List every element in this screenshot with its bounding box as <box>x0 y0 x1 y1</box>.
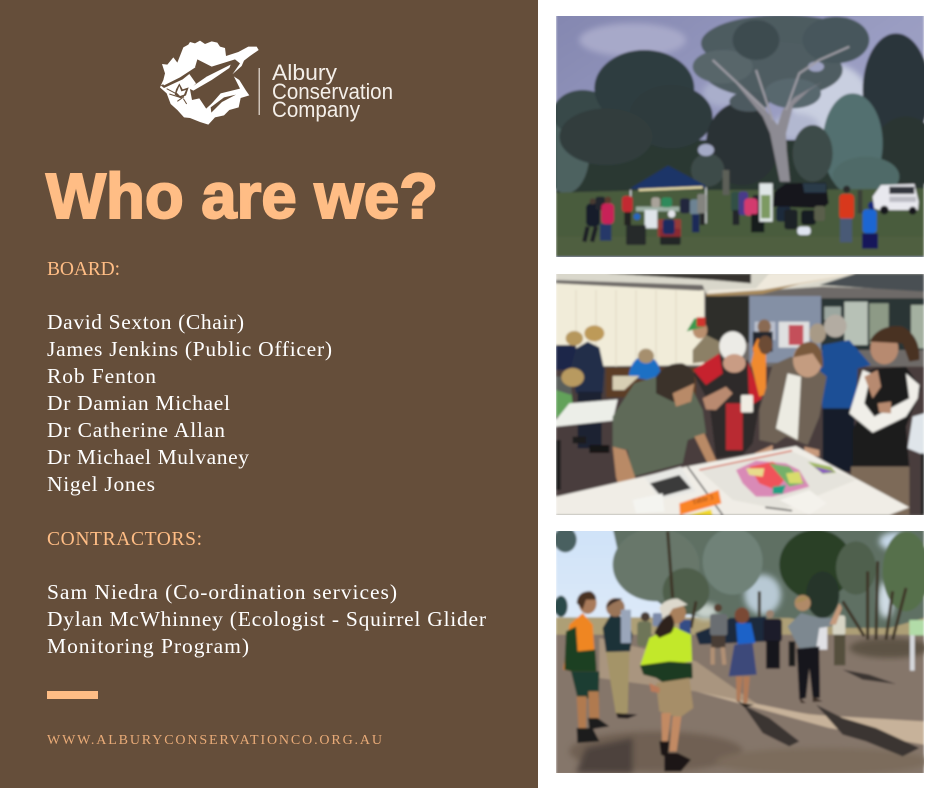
woman in hi-vis <box>640 626 692 666</box>
woman in red and black vest <box>693 353 761 458</box>
text: logo wordmark: Company <box>272 97 360 122</box>
text block: board members: Dr Catherine Allan <box>47 418 225 442</box>
icon: logo emblem <box>160 40 259 125</box>
text block: board members: David Sexton (Chair) <box>47 310 244 334</box>
text: logo wordmark <box>272 60 393 122</box>
floor <box>556 367 924 515</box>
red jacket man <box>839 194 854 219</box>
panel: brown left column <box>0 0 538 788</box>
text block: contractors: Dylan McWhinney (Ecologist - Squirrel Glider <box>47 607 486 631</box>
left desk <box>556 399 618 427</box>
text block: contractors: Monitoring Program) <box>47 634 249 658</box>
woman in blue top <box>629 356 661 380</box>
text block: board members: James Jenkins (Public Officer) <box>47 337 332 361</box>
text block: board members <box>47 310 332 496</box>
windows <box>821 298 924 350</box>
photo: field gathering under gum trees <box>556 16 924 257</box>
low background trees <box>556 140 924 193</box>
accent bar <box>47 691 98 699</box>
papers <box>644 467 696 500</box>
logo: Albury Conservation Company <box>160 41 393 125</box>
man in grey-green <box>613 377 706 477</box>
trunks <box>858 190 862 213</box>
text block: board members: Rob Fenton <box>47 364 156 388</box>
text block: board members: Dr Michael Mulvaney <box>47 445 249 469</box>
distant field <box>556 617 924 637</box>
shadows <box>743 670 919 756</box>
man in grey shirt pointing <box>788 613 833 651</box>
back people <box>758 319 771 334</box>
centre group <box>731 192 740 212</box>
child blue jacket <box>863 209 877 233</box>
photo: workshop around map table <box>556 274 924 515</box>
dark car <box>773 183 829 208</box>
woman in blue top and floral skirt <box>736 623 755 645</box>
orange label <box>679 490 721 515</box>
camp chairs <box>626 225 646 245</box>
gum trunk <box>736 82 823 182</box>
curtain wall <box>556 283 704 367</box>
grass <box>556 188 924 257</box>
man in dark jacket <box>603 611 633 652</box>
orange hi-vis <box>751 342 764 397</box>
seated people right <box>776 207 791 222</box>
ground <box>556 635 924 775</box>
map <box>736 461 809 497</box>
website url: WWW.ALBURYCONSERVATIONCO.ORG.AU <box>47 733 382 748</box>
photo: workshop around map table: Table 3 <box>691 492 714 506</box>
woman in tan blazer <box>759 357 827 445</box>
people left <box>586 203 600 227</box>
right trees <box>863 33 929 147</box>
white ute <box>873 184 919 210</box>
section heading: contractors: CONTRACTORS: <box>47 529 202 550</box>
woman in black vest <box>853 367 921 467</box>
text block: contractors: Sam Niedra (Co-ordination services) <box>47 580 397 604</box>
sign <box>910 635 915 671</box>
title: Who are we? <box>46 160 438 232</box>
big gum crown <box>701 15 864 72</box>
tall man blue jumper <box>819 340 871 410</box>
text: logo wordmark: Albury <box>272 60 337 85</box>
ceiling <box>556 270 924 293</box>
right table <box>908 413 924 455</box>
tree canopy band <box>613 528 924 628</box>
far left seated people <box>556 345 576 370</box>
man in green-red cap <box>693 335 721 363</box>
divider: logo vertical rule <box>259 68 260 115</box>
distant group <box>710 614 727 636</box>
text block: contractors <box>47 580 486 658</box>
dark column <box>705 296 749 343</box>
section heading: board: BOARD: <box>47 259 120 280</box>
photo: site tour under trees <box>556 531 924 773</box>
blue-grey wall <box>749 296 821 363</box>
text block: board members: Dr Damian Michael <box>47 391 230 415</box>
man in green and orange <box>563 613 597 671</box>
text: logo wordmark: Conservation <box>272 79 393 104</box>
dark car <box>695 616 769 645</box>
people under tent <box>622 196 633 212</box>
tent <box>630 166 705 190</box>
trees <box>554 527 577 552</box>
text block: board members: Nigel Jones <box>47 472 155 496</box>
map table <box>556 446 909 515</box>
